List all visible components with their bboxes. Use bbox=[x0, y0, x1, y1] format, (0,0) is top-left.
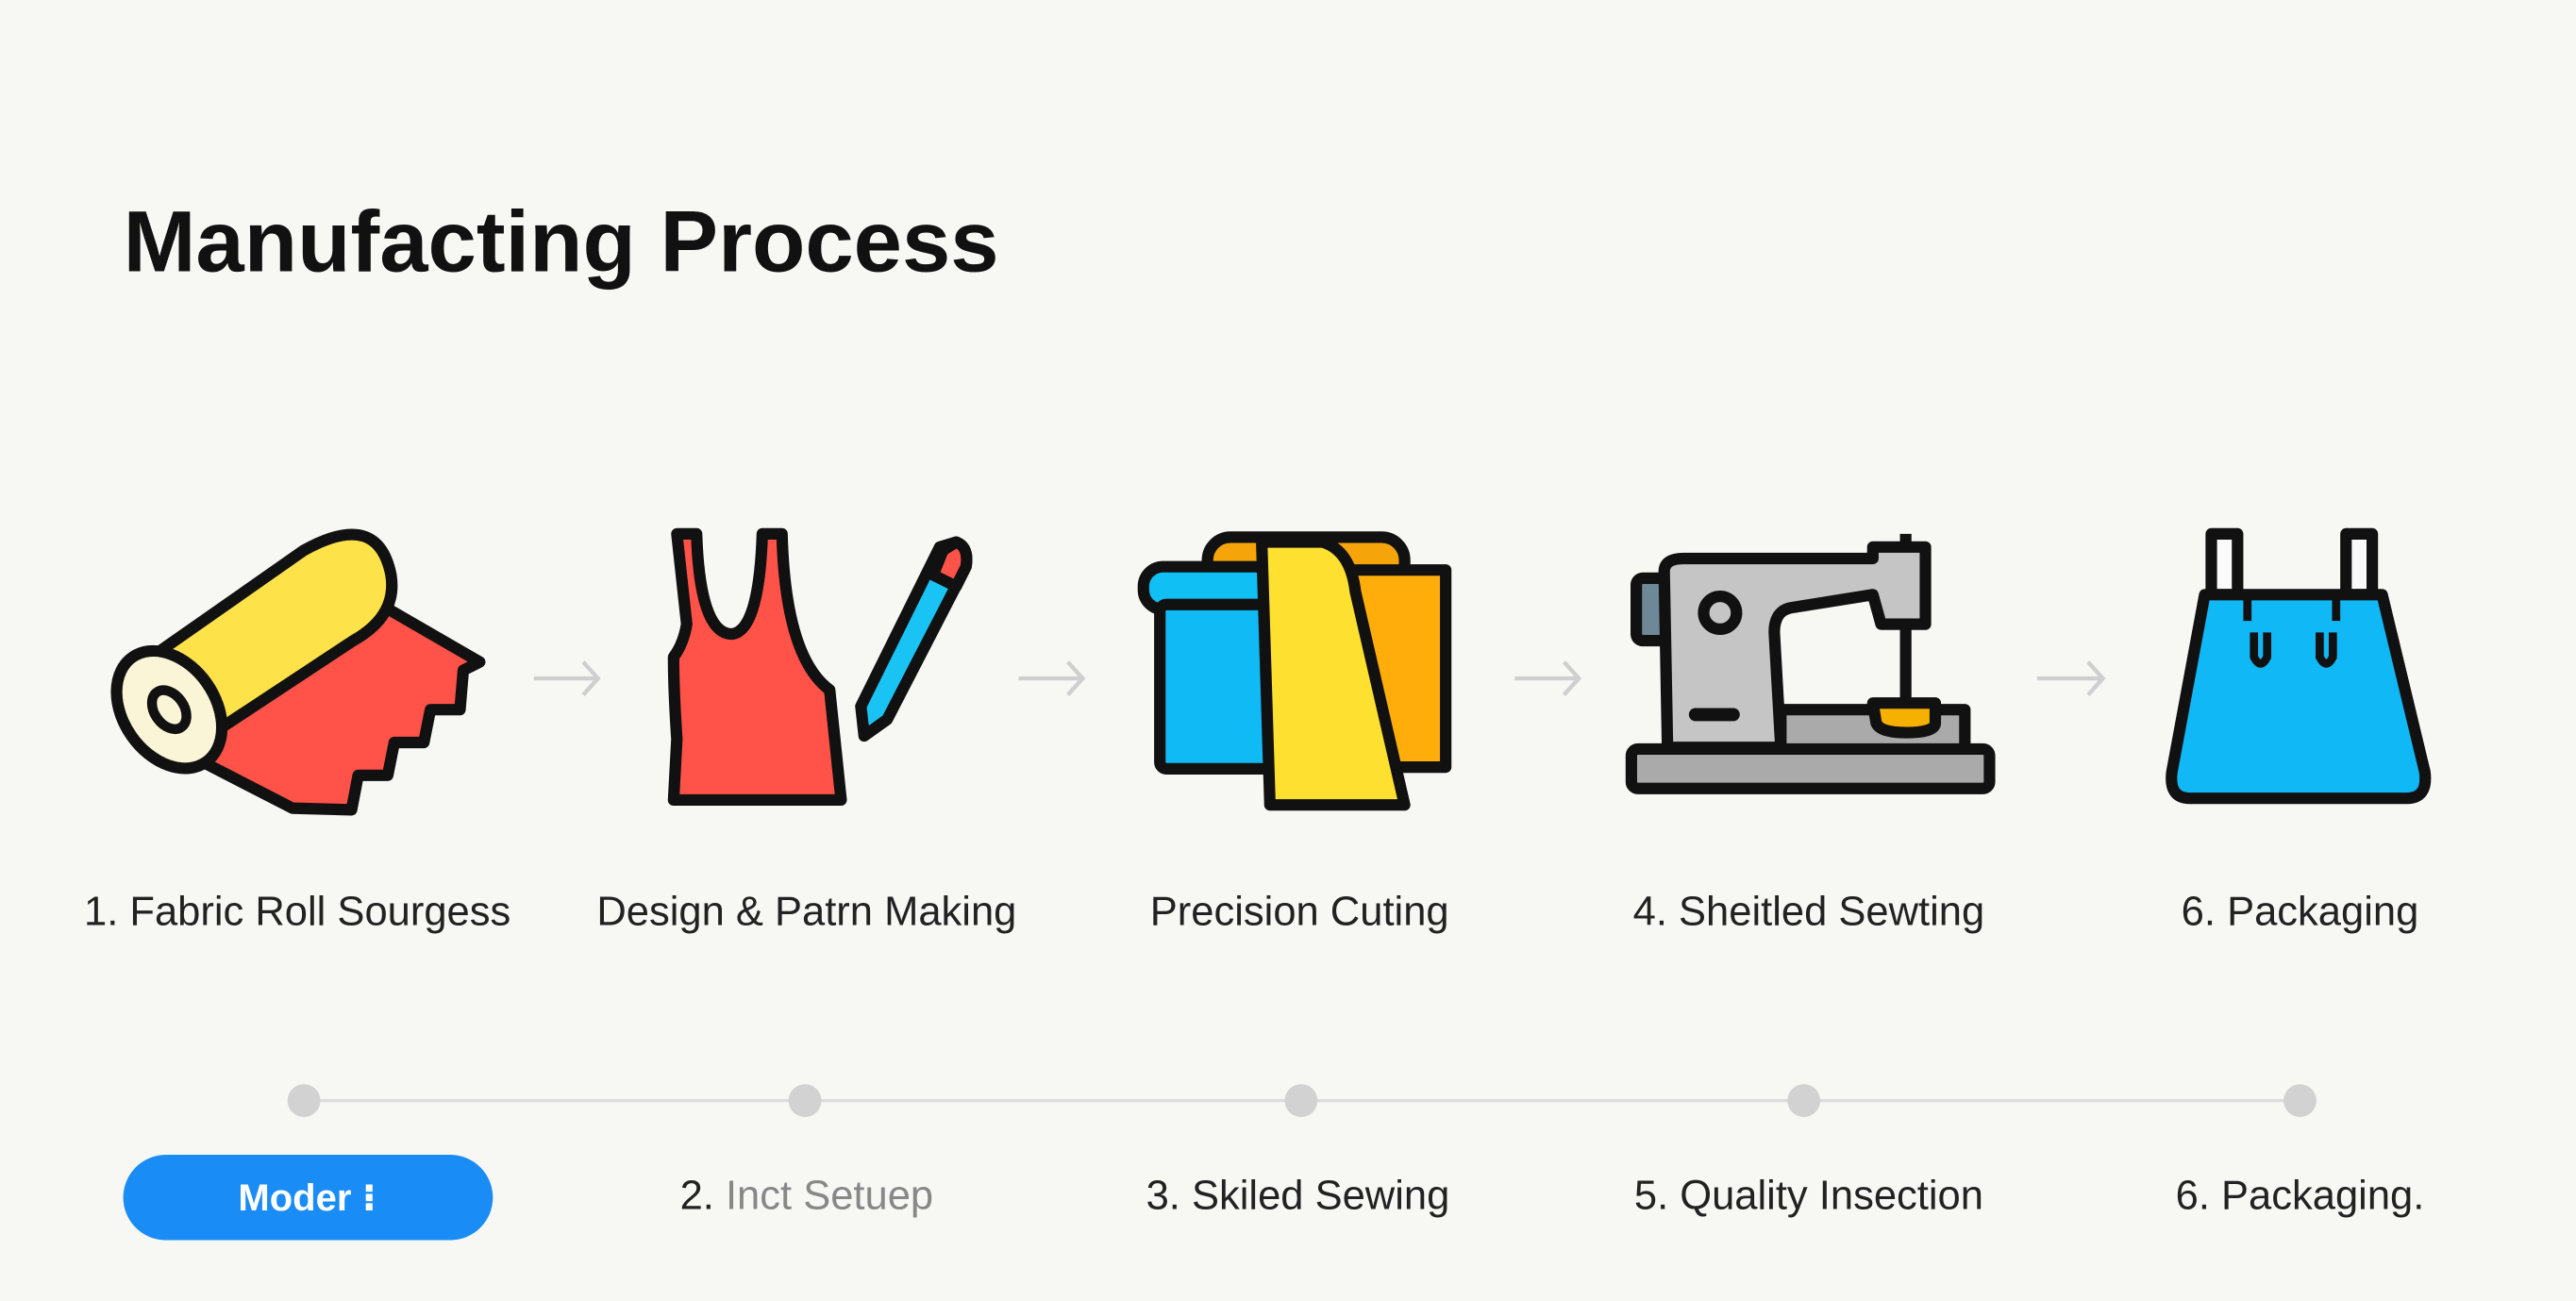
step labels: Design & Patrn Making bbox=[596, 889, 1016, 934]
button: Moder: Moder ⁝ bbox=[238, 1177, 376, 1219]
bottom labels: 2. Inct Setuep bbox=[680, 1173, 933, 1218]
arrow 1 bbox=[534, 662, 598, 695]
step labels: 4. Sheitled Sewting bbox=[1633, 889, 1984, 934]
step labels: Precision Cuting bbox=[1150, 889, 1449, 934]
bottom labels: 3. Skiled Sewing bbox=[1146, 1173, 1449, 1218]
icon: tank top with pencil bbox=[674, 534, 966, 800]
arrow 2 bbox=[1018, 662, 1082, 695]
icon: sewing machine bbox=[1631, 534, 1989, 789]
bottom labels: 5. Quality Insection bbox=[1634, 1173, 1983, 1218]
step labels: 6. Packaging bbox=[2182, 889, 2418, 934]
bottom labels bbox=[680, 1173, 2424, 1218]
bottom labels: 6. Packaging. bbox=[2176, 1173, 2424, 1218]
arrow 3 bbox=[1514, 662, 1579, 695]
step labels bbox=[84, 889, 2418, 934]
button: Moder bbox=[124, 1155, 493, 1241]
icon: precision cutting bbox=[1144, 537, 1446, 805]
icon: packaging bag bbox=[2171, 534, 2425, 798]
arrow 4 bbox=[2037, 662, 2103, 695]
timeline bbox=[288, 1084, 2317, 1117]
title: Manufacting Process bbox=[124, 192, 999, 290]
step labels: 1. Fabric Roll Sourgess bbox=[84, 889, 510, 934]
icon: fabric roll bbox=[94, 535, 479, 809]
